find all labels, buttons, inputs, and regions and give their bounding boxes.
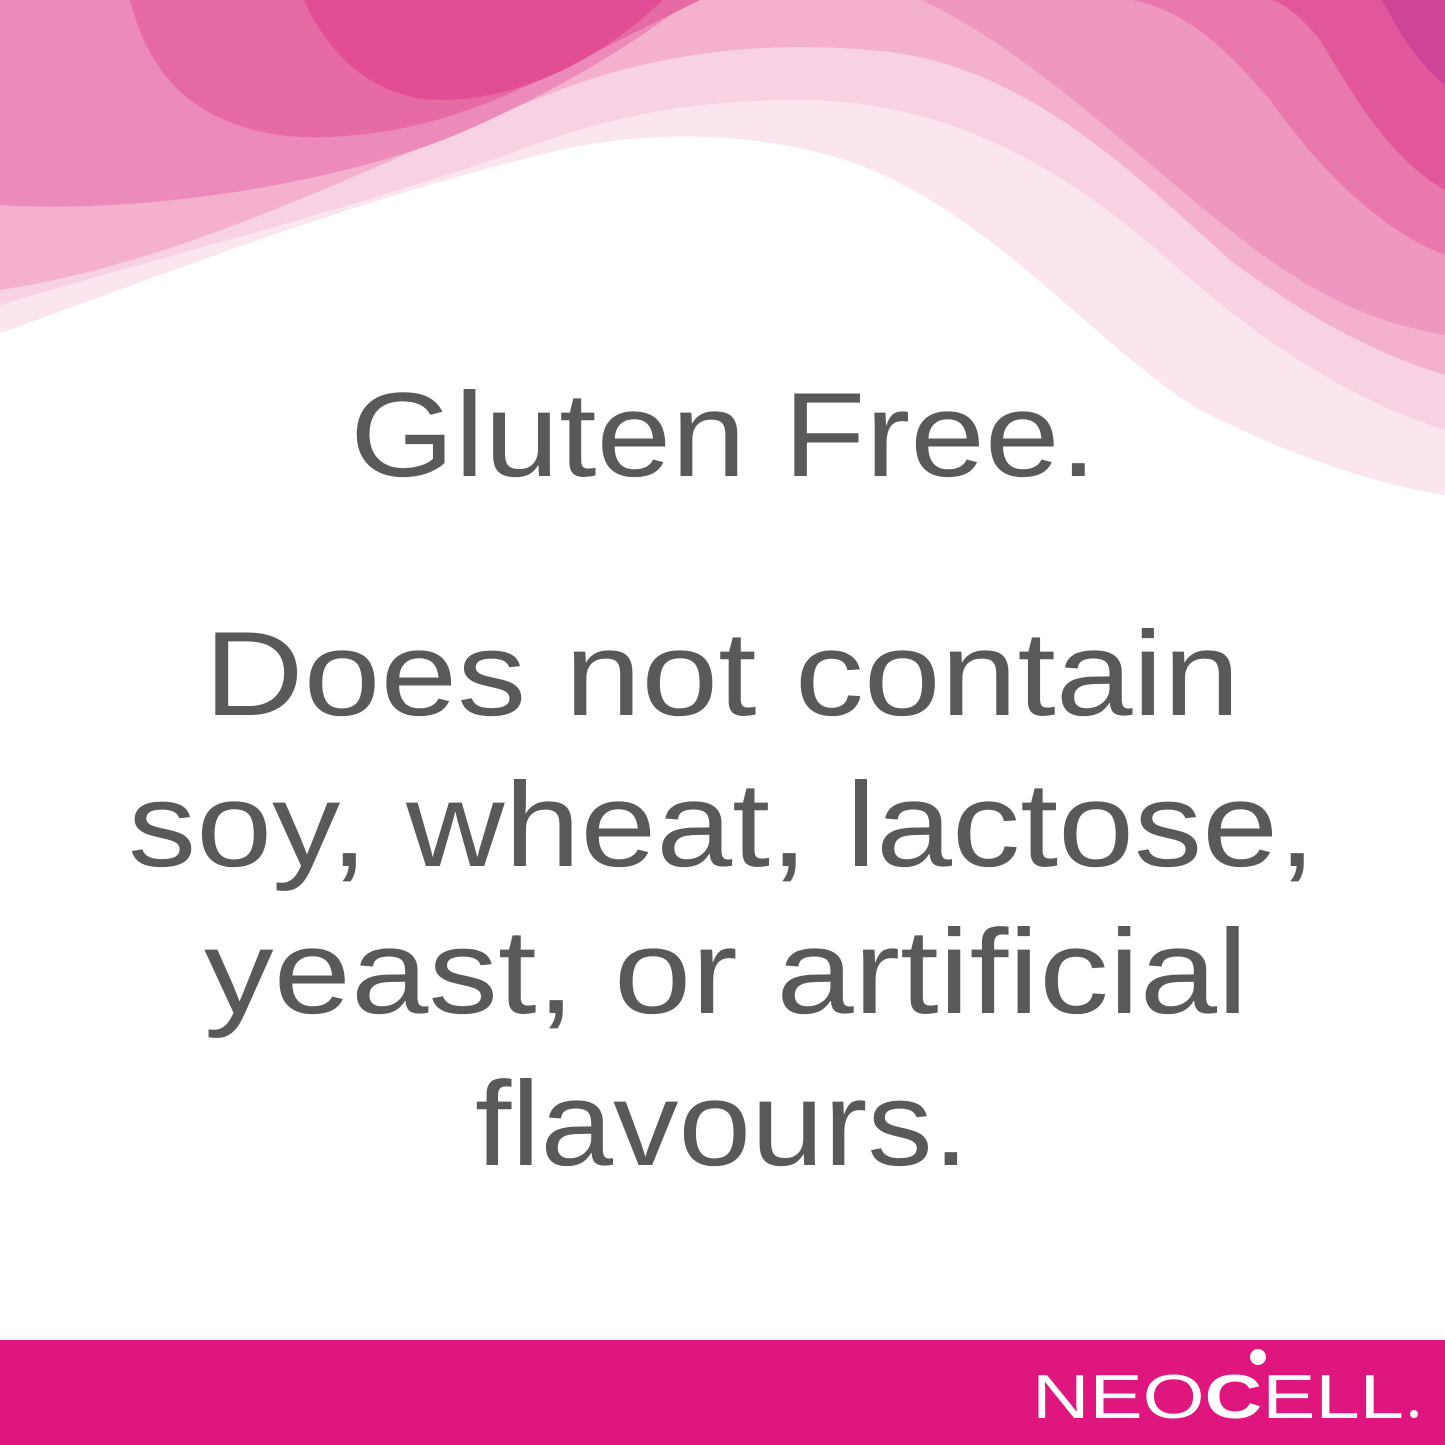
body text block: soy, wheat, lactose, xyxy=(128,758,1316,892)
footer bar xyxy=(0,1340,1445,1445)
body text block: Does not contain xyxy=(204,607,1240,741)
body text block: yeast, or artificial xyxy=(204,905,1248,1039)
body text block: flavours. xyxy=(475,1057,969,1191)
logo: NEOCELL: NEO CELL xyxy=(1032,1363,1404,1432)
headline: Gluten Free.: Gluten Free. xyxy=(350,368,1097,502)
body text block xyxy=(128,607,1316,1191)
wave header xyxy=(0,0,1445,495)
